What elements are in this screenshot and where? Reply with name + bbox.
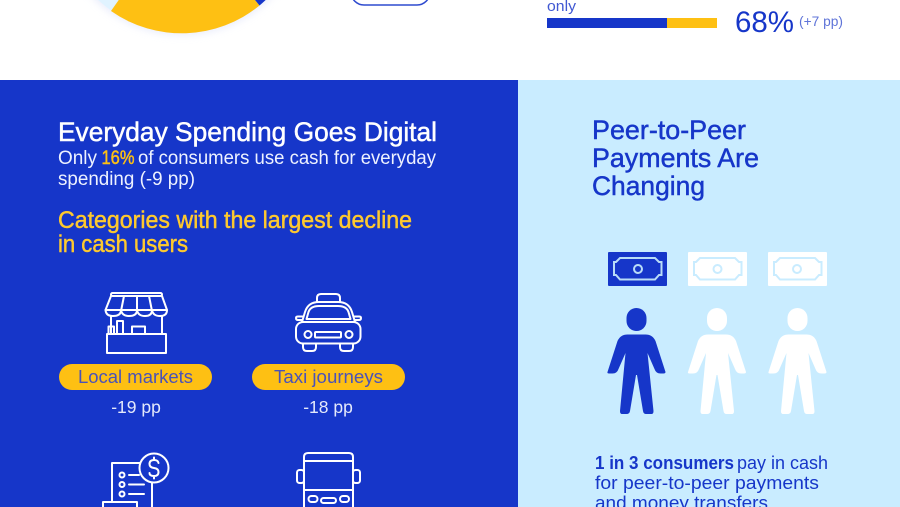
label pill: taxi journeys: Taxi journeys — [274, 366, 383, 387]
icon: bus — [297, 453, 360, 507]
subtitle text: spending (-9 pp) — [58, 169, 195, 190]
value: taxi journeys: -18 pp — [303, 397, 353, 417]
subtitle text — [58, 148, 436, 190]
subtitle text: Only — [58, 148, 97, 169]
stacked bar with value — [547, 0, 843, 39]
label pill: local markets — [59, 364, 212, 390]
body text: for peer-to-peer payments — [595, 472, 819, 493]
body text — [595, 452, 828, 507]
heading: Changing — [592, 171, 705, 201]
button outline — [351, 0, 430, 5]
icon: blue person — [607, 308, 666, 414]
heading: Payments Are — [592, 143, 759, 173]
subheading: Categories with the largest decline — [58, 207, 412, 234]
icon: white banknote 2 — [768, 252, 827, 286]
subheading — [58, 207, 412, 258]
stacked bar with value: 68% — [735, 6, 794, 39]
category: taxi journeys — [252, 294, 405, 417]
stacked bar with value: (+7 pp) — [799, 13, 843, 29]
icon: white person 2 — [768, 308, 826, 414]
body text: pay in cash — [737, 452, 828, 473]
label pill: taxi journeys — [252, 364, 405, 390]
body text: 1 in 3 consumers — [595, 452, 734, 473]
panel: cash usage summary (cropped top) — [57, 0, 843, 39]
icon: white person 1 — [688, 308, 746, 414]
icon: blue banknote — [608, 252, 667, 286]
heading — [592, 115, 759, 201]
icon: taxi — [296, 294, 361, 351]
subtitle text: 16% — [102, 148, 135, 169]
value: local markets: -19 pp — [111, 397, 161, 417]
panel: peer-to-peer payments — [518, 80, 900, 507]
category: local markets — [59, 293, 212, 417]
label pill: local markets: Local markets — [78, 366, 193, 387]
pie chart — [57, 0, 307, 35]
panel: everyday spending — [0, 80, 518, 507]
icon: market stall — [106, 293, 167, 353]
icon: white banknote 1 — [688, 252, 747, 286]
icon: bill with dollar — [103, 454, 168, 507]
heading: Peer-to-Peer — [592, 115, 746, 145]
subtitle text: of consumers use cash for everyday — [138, 148, 436, 169]
heading: Everyday Spending Goes Digital — [58, 117, 437, 147]
subheading: in cash users — [58, 231, 188, 258]
